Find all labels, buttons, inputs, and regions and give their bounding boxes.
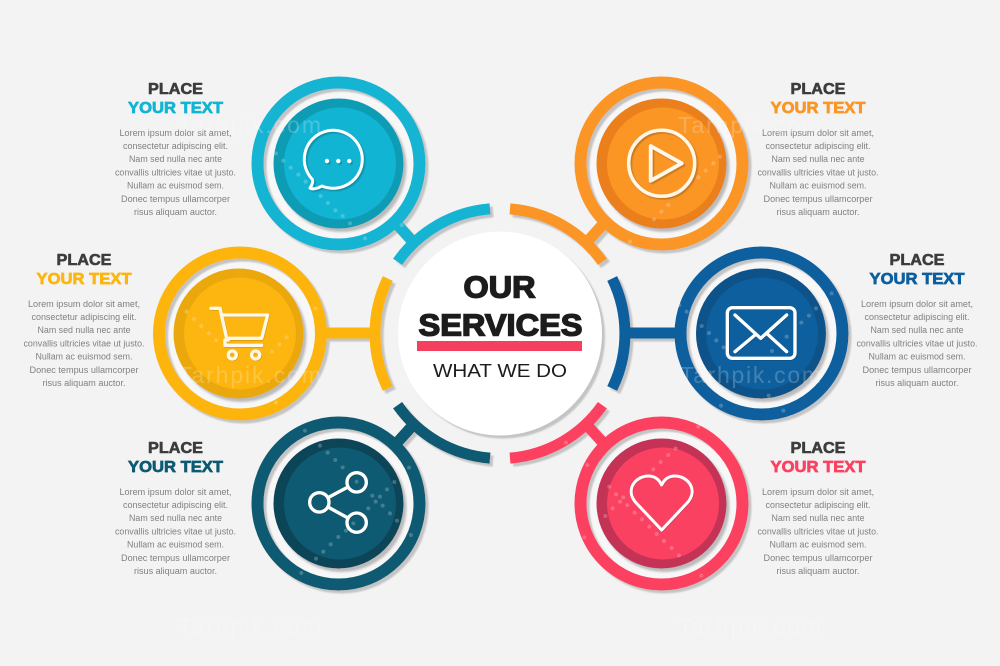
body copy: risus aliquam auctor. [876,378,958,388]
watermark: Tarhpik.com [178,362,321,388]
body copy: Nullam ac euismod sem. [868,352,966,362]
body copy: consectetur adipiscing elit. [766,141,870,151]
panel: cart service circle [159,252,388,414]
disc [174,268,304,398]
ring, connector and arc [510,82,742,262]
watermark dots [628,155,722,244]
inner band [686,258,836,408]
body copy: Nam sed nulla nec ante [772,513,864,523]
body copy: Nam sed nulla nec ante [129,513,222,523]
label your text: YOUR TEXT [36,271,132,288]
body copy: convallis ultricies vitae ut justo. [758,526,878,536]
label your text: YOUR TEXT [770,100,866,117]
ring, connector and arc [612,252,842,414]
body copy [856,299,978,388]
panel: heart service circle [510,405,742,584]
ring, connector and arc [159,252,388,414]
body copy: Donec tempus ullamcorper [764,553,872,563]
icon: play button [629,130,695,196]
body copy: Lorem ipsum dolor sit amet, [762,128,874,138]
heading: our services: OUR [464,270,536,304]
panel: play service circle [510,82,742,262]
body copy: convallis ultricies vitae ut justo. [24,338,144,348]
disc [596,98,726,228]
body copy: Lorem ipsum dolor sit amet, [762,487,874,497]
body copy: Donec tempus ullamcorper [121,194,230,204]
watermark: Tarhpik.com [678,112,821,138]
ring, connector and arc [510,405,742,584]
body copy: Lorem ipsum dolor sit amet, [28,299,140,309]
body copy: Nam sed nulla nec ante [772,154,864,164]
icon: envelope [727,308,795,358]
heading: our services: SERVICES [418,308,582,342]
body copy [758,487,878,576]
body copy: Donec tempus ullamcorper [862,365,972,375]
label your text: YOUR TEXT [870,271,965,288]
text block: mail [856,252,978,388]
body copy: Nam sed nulla nec ante [129,154,222,164]
label your text: YOUR TEXT [128,459,224,476]
heading: our services [418,270,582,342]
body copy: convallis ultricies vitae ut justo. [115,526,236,536]
body copy: Donec tempus ullamcorper [764,194,872,204]
body copy: convallis ultricies vitae ut justo. [115,168,236,178]
body copy [758,128,878,217]
body copy: Nullam ac euismod sem. [127,181,224,191]
label place: PLACE [56,252,112,269]
watermark: Tarhpik.com [178,112,321,138]
body copy: convallis ultricies vitae ut justo. [856,338,978,348]
body copy: Donec tempus ullamcorper [121,553,230,563]
watermark dots [185,306,317,405]
label your text: YOUR TEXT [128,100,224,117]
panel: chat service circle [258,82,490,262]
label place: PLACE [148,440,203,457]
icon: chat bubble [304,130,362,189]
body copy: consectetur adipiscing elit. [123,141,228,151]
body copy: convallis ultricies vitae ut justo. [758,168,878,178]
body copy: Nam sed nulla nec ante [38,325,130,335]
body copy [115,487,236,576]
centre title circle [398,232,602,436]
body copy: Donec tempus ullamcorper [30,365,138,375]
body copy [115,128,236,217]
body copy: Lorem ipsum dolor sit amet, [861,299,973,309]
inner band [165,258,315,408]
body copy: consectetur adipiscing elit. [864,312,970,322]
watermark dots [677,291,834,413]
disc [274,438,404,568]
ring, connector and arc [258,82,490,262]
body copy: risus aliquam auctor. [134,207,217,217]
body copy: Nullam ac euismod sem. [770,540,866,550]
body copy: risus aliquam auctor. [776,566,860,576]
icon: shopping cart [211,308,268,359]
watermark: Tarhpik.com [678,614,821,640]
disc [696,268,826,398]
ring, connector and arc [258,405,490,584]
watermark: Tarhpik.com [178,614,321,640]
body copy: Nullam ac euismod sem. [36,352,132,362]
body copy: risus aliquam auctor. [134,566,217,576]
text block: play [758,81,878,217]
text block: share [115,440,236,576]
icon: heart [631,476,692,530]
label your text: YOUR TEXT [770,459,866,476]
body copy: consectetur adipiscing elit. [32,312,136,322]
watermark dots [564,425,703,578]
body copy: consectetur adipiscing elit. [766,500,870,510]
inner band [264,88,414,238]
inner band [586,88,736,238]
disc [596,438,726,568]
body copy: Nullam ac euismod sem. [127,540,224,550]
watermark dots [274,151,404,240]
body copy: Lorem ipsum dolor sit amet, [120,128,232,138]
title underline [417,341,582,351]
white circle [398,232,602,436]
body copy: Nam sed nulla nec ante [870,325,964,335]
watermark: Tarhpik.com [680,362,821,388]
subtitle: WHAT WE DO [433,360,567,381]
body copy: Lorem ipsum dolor sit amet, [120,487,232,497]
body copy: risus aliquam auctor. [776,207,860,217]
label place: PLACE [148,81,203,98]
icon: share nodes [310,473,366,532]
body copy: Nullam ac euismod sem. [770,181,866,191]
body copy: consectetur adipiscing elit. [123,500,228,510]
disc [274,98,404,228]
panel: mail service circle [612,252,842,414]
panel: share service circle [258,405,490,584]
label place: PLACE [790,440,846,457]
body copy: risus aliquam auctor. [42,378,126,388]
label place: PLACE [890,252,944,269]
label place: PLACE [790,81,846,98]
text block: chat [115,81,236,217]
inner band [264,428,414,578]
text block: heart [758,440,878,576]
text block: cart [24,252,144,388]
watermark dots [299,429,413,575]
body copy [24,299,144,388]
watermark [178,112,821,640]
inner band [586,428,736,578]
